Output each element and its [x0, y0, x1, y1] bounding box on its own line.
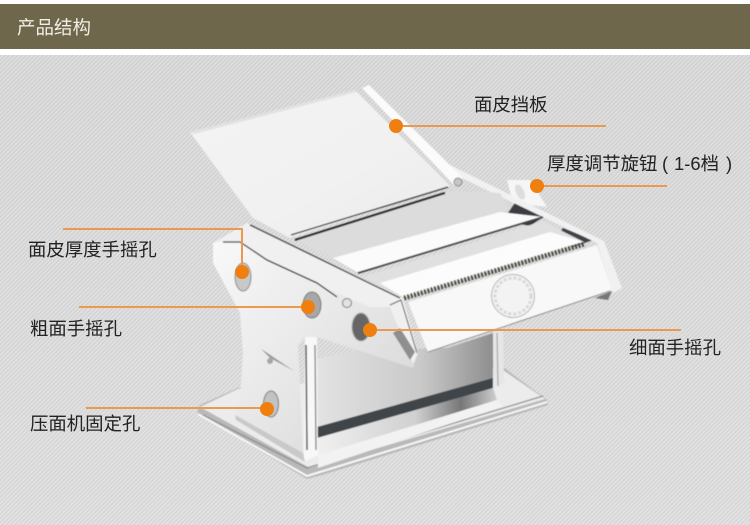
front face — [408, 245, 612, 352]
callout: 厚度调节旋钮: ) — [726, 153, 732, 174]
title banner — [0, 4, 750, 49]
base plate — [197, 367, 548, 479]
callout: 压面机固定孔 — [30, 402, 274, 434]
title: 产品结构 — [17, 17, 91, 38]
callout: 细面手摇孔 — [363, 323, 721, 358]
callout: 粗面手摇孔: 粗面手摇孔 — [30, 318, 122, 339]
folding plate — [190, 85, 463, 238]
callout: 厚度调节旋钮: 厚度调节旋钮 — [547, 153, 657, 174]
adjustment bar — [443, 165, 622, 293]
callout: 面皮挡板: 面皮挡板 — [474, 94, 548, 115]
callout: 厚度调节旋钮 — [530, 153, 732, 193]
crank holes — [235, 263, 251, 291]
side post — [304, 337, 318, 462]
callout: 面皮厚度手摇孔 — [28, 229, 249, 279]
back wall and opening — [313, 330, 504, 468]
callout: 厚度调节旋钮: 1-6档 — [674, 153, 719, 174]
side panel — [213, 223, 418, 462]
callout: 面皮厚度手摇孔: 面皮厚度手摇孔 — [28, 239, 157, 260]
logo badge — [492, 274, 534, 318]
cutter teeth — [404, 244, 584, 298]
product illustration: pasta machine — [190, 85, 622, 479]
callout: 面皮挡板 — [389, 94, 606, 133]
rollers — [295, 191, 584, 297]
callout: 细面手摇孔: 细面手摇孔 — [629, 337, 721, 358]
callout: 压面机固定孔: 压面机固定孔 — [30, 413, 140, 434]
callout: 粗面手摇孔 — [30, 300, 315, 339]
callout: 厚度调节旋钮: ( — [662, 153, 669, 174]
